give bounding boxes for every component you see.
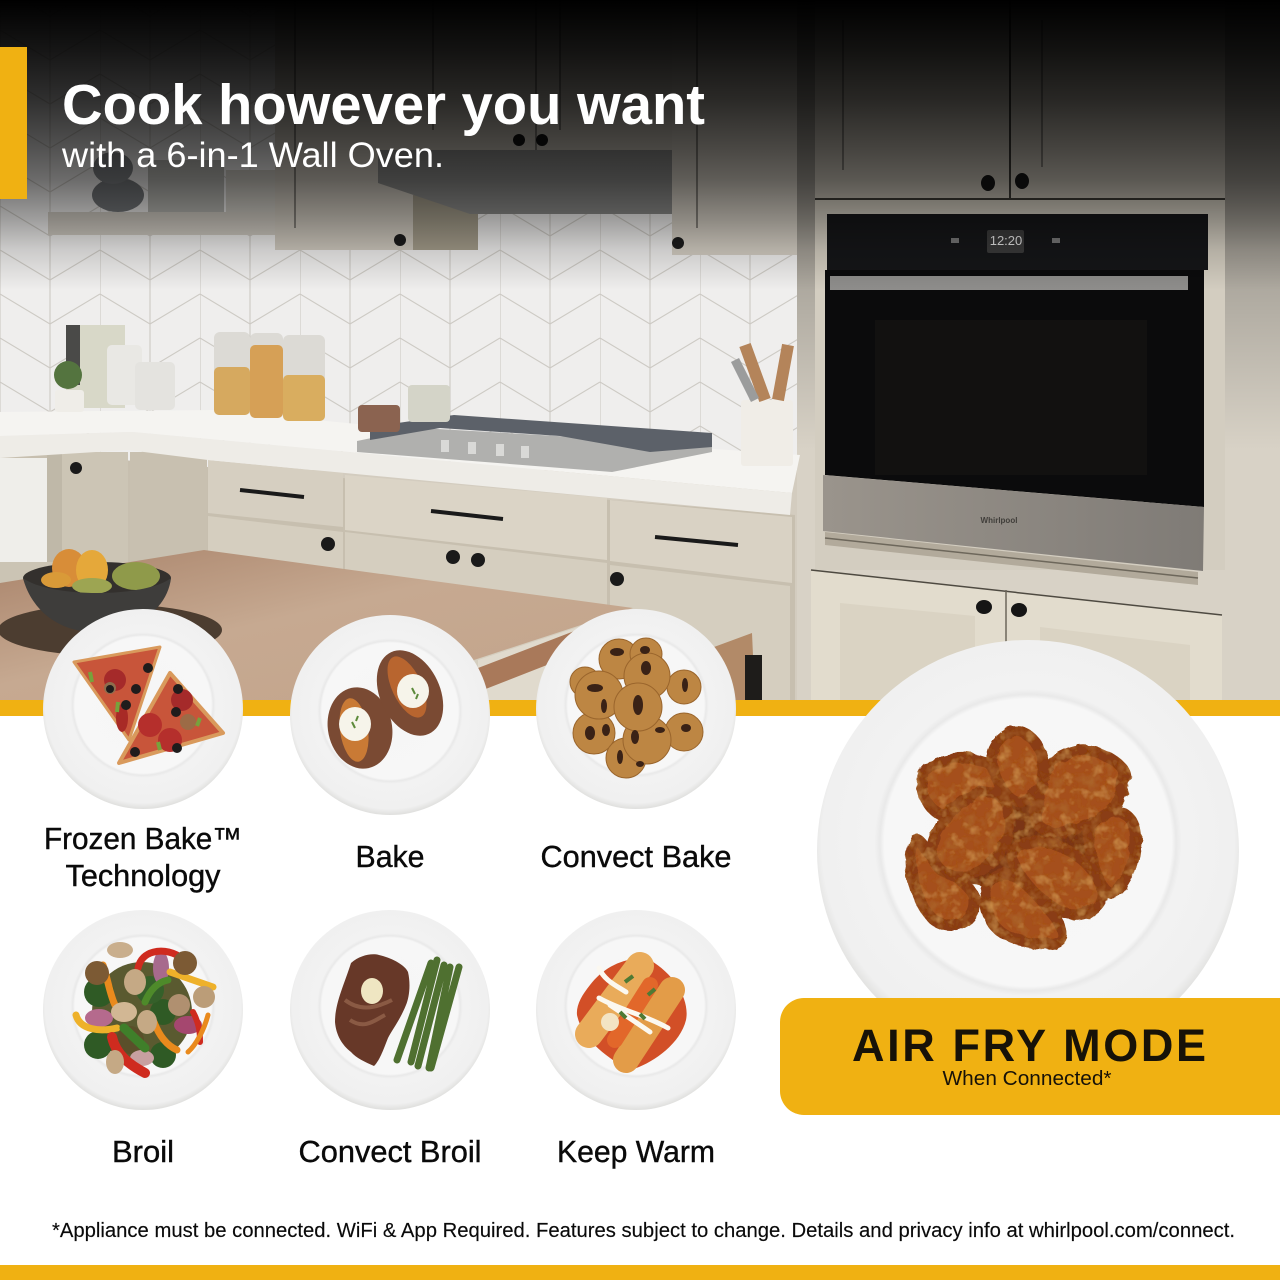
plate: frozen bake xyxy=(43,609,243,809)
mode: frozen bake xyxy=(43,609,243,893)
plate: broil xyxy=(43,910,243,1110)
banner subheading: When Connected* xyxy=(942,1068,1112,1090)
kitchen photo background xyxy=(0,0,1280,700)
label: Frozen Bake™ xyxy=(44,822,242,856)
lower cabinets xyxy=(0,450,795,700)
plate: convect broil xyxy=(290,910,490,1110)
fruit bowl xyxy=(0,549,222,656)
food: steak and asparagus xyxy=(335,954,459,1068)
base cabinet under oven xyxy=(811,570,1222,700)
food: pizza slices xyxy=(74,647,223,763)
upper cabinets, shelf and range hood xyxy=(48,40,797,255)
label: Convect Bake xyxy=(540,840,732,874)
food: fried wings xyxy=(911,731,1136,944)
food: baked potatoes xyxy=(320,640,456,775)
mode: frozen bake: Technology xyxy=(66,859,221,893)
feature: air fry mode xyxy=(780,640,1280,1115)
subtitle: with a 6-in-1 Wall Oven. xyxy=(61,135,444,175)
food: vegetable stir fry xyxy=(76,942,215,1074)
countertop xyxy=(0,410,800,515)
plate: convect bake xyxy=(536,609,736,809)
food: cookies xyxy=(570,638,703,778)
wood island xyxy=(0,550,762,700)
right wall and tall cabinets xyxy=(797,29,1280,470)
label: Convect Broil xyxy=(298,1135,482,1169)
banner: air fry xyxy=(780,998,1280,1115)
banner heading: AIR FRY MODE xyxy=(852,1020,1206,1071)
plate: air fry xyxy=(817,640,1239,1062)
plate: keep warm xyxy=(536,910,736,1110)
label: Bake xyxy=(356,840,424,874)
gold accent bar beside title xyxy=(0,47,27,199)
footnote: *Appliance must be connected. WiFi & App Required. Features subject to change. Details and privacy info at whirlpool.com/connect. xyxy=(52,1220,1235,1242)
mode: broil xyxy=(43,910,243,1169)
plate: bake xyxy=(290,615,490,815)
label: Broil xyxy=(112,1135,174,1169)
bottom gold bar xyxy=(0,1265,1280,1280)
food: enchiladas xyxy=(577,959,687,1070)
mode: keep warm xyxy=(536,910,736,1169)
mode: convect broil xyxy=(290,910,490,1169)
chevron tile backsplash xyxy=(0,88,797,470)
mode: convect bake xyxy=(536,609,736,874)
gold strip under photo xyxy=(0,700,1280,716)
wall oven: 12:20 xyxy=(990,233,1022,248)
counter jars and utensils xyxy=(54,325,793,466)
mode: bake xyxy=(290,615,490,874)
title: Cook however you want xyxy=(62,73,705,137)
wall oven: Whirlpool xyxy=(981,516,1017,525)
dark top gradient overlay xyxy=(0,0,1280,290)
gas cooktop xyxy=(357,415,712,472)
label: Keep Warm xyxy=(557,1135,715,1169)
wall oven xyxy=(823,214,1208,585)
